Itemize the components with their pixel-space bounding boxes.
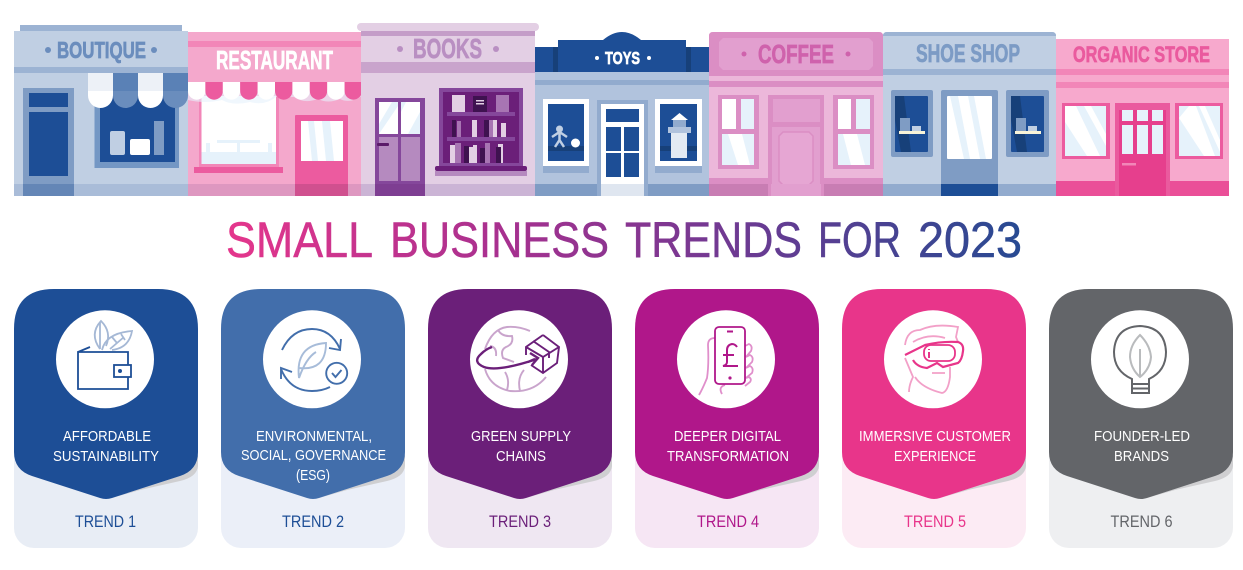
label: founder-led brands: FOUNDER-LED [1094, 428, 1190, 445]
icon: phone in hand [699, 327, 753, 395]
coffee left window [718, 95, 759, 169]
panel: trend 5 [842, 289, 1026, 548]
shoe shop right window [1006, 90, 1049, 157]
boutique window [94, 85, 179, 168]
organic door [1115, 103, 1170, 196]
toys sign board [535, 32, 709, 72]
label: deeper digital transformation: TRANSFORMATION [667, 448, 789, 465]
label: esg: (ESG) [296, 467, 330, 484]
label: affordable sustainability: SUSTAINABILITY [53, 448, 159, 465]
label: founder-led brands: BRANDS [1114, 448, 1169, 465]
shop: toys [535, 32, 709, 196]
icon: globe and parcel [477, 327, 559, 391]
panel: trend 1 [14, 289, 198, 548]
label: immersive customer experience: EXPERIENCE [894, 448, 976, 465]
shop: restaurant [188, 32, 362, 196]
shop: coffee [709, 32, 883, 196]
label: trend 5: TREND 5 [904, 513, 966, 531]
label: esg [241, 428, 386, 484]
toys right window [655, 99, 702, 173]
shop: books [357, 23, 539, 196]
label: deeper digital transformation: DEEPER DIGITAL [674, 428, 781, 445]
organic right window [1175, 103, 1223, 159]
panel: trend 6 [1049, 289, 1233, 548]
label: affordable sustainability [53, 428, 159, 465]
title: 2023 [918, 212, 1022, 268]
icon: wallet with leaves [78, 321, 132, 389]
panel: trend 4 [635, 289, 819, 548]
label: esg: ENVIRONMENTAL, [256, 428, 372, 445]
label: immersive customer experience: IMMERSIVE CUSTOMER [859, 428, 1011, 445]
title [226, 212, 1022, 268]
boutique awning [88, 73, 188, 108]
sign: shoe shop: SHOE SHOP [916, 41, 1020, 68]
boutique door [23, 88, 74, 196]
label: green supply chains: CHAINS [496, 448, 546, 465]
organic left window [1062, 103, 1110, 159]
books window [435, 88, 527, 176]
coffee sign plaque: COFFEE [758, 39, 834, 69]
toys sign board: TOYS [605, 48, 640, 68]
coffee door [768, 95, 824, 196]
sign: restaurant: RESTAURANT [216, 45, 333, 75]
label: trend 2: TREND 2 [282, 513, 344, 531]
restaurant door [295, 115, 348, 196]
title: BUSINESS [390, 212, 609, 268]
toys door [597, 100, 648, 196]
label: green supply chains: GREEN SUPPLY [471, 428, 571, 445]
shop: organic store [1056, 39, 1229, 196]
label: esg: SOCIAL, GOVERNANCE [241, 447, 386, 464]
label: deeper digital transformation [667, 428, 789, 465]
title: TRENDS [625, 212, 802, 268]
icon: recycling arrows and leaf [281, 329, 347, 391]
panel: shopfront row [14, 23, 1229, 196]
shop: boutique [14, 25, 188, 196]
shoe shop left window [891, 90, 933, 157]
label: affordable sustainability: AFFORDABLE [63, 428, 151, 445]
icon: light bulb with leaf [1114, 326, 1166, 393]
label: trend 3: TREND 3 [489, 513, 551, 531]
label: green supply chains [471, 428, 571, 465]
title: FOR [818, 212, 901, 268]
sign: boutique: BOUTIQUE [57, 37, 146, 63]
books door [375, 98, 425, 196]
label: trend 1: TREND 1 [75, 513, 136, 531]
title: SMALL [226, 212, 373, 268]
sign: books: BOOKS [413, 33, 482, 64]
toys left window [543, 99, 589, 173]
restaurant awning [188, 82, 362, 104]
panel: trend 2 [221, 289, 405, 548]
label: trend 4: TREND 4 [697, 513, 759, 531]
shop: shoe shop [883, 32, 1056, 196]
restaurant window [194, 96, 283, 173]
panel: trend 3 [428, 289, 612, 548]
shoe shop door [941, 90, 998, 196]
label: immersive customer experience [859, 428, 1011, 465]
coffee sign plaque [719, 38, 873, 70]
label: founder-led brands [1094, 428, 1190, 465]
coffee right window [833, 95, 874, 169]
icon: person with VR headset [905, 326, 963, 393]
label: trend 6: TREND 6 [1110, 513, 1172, 531]
